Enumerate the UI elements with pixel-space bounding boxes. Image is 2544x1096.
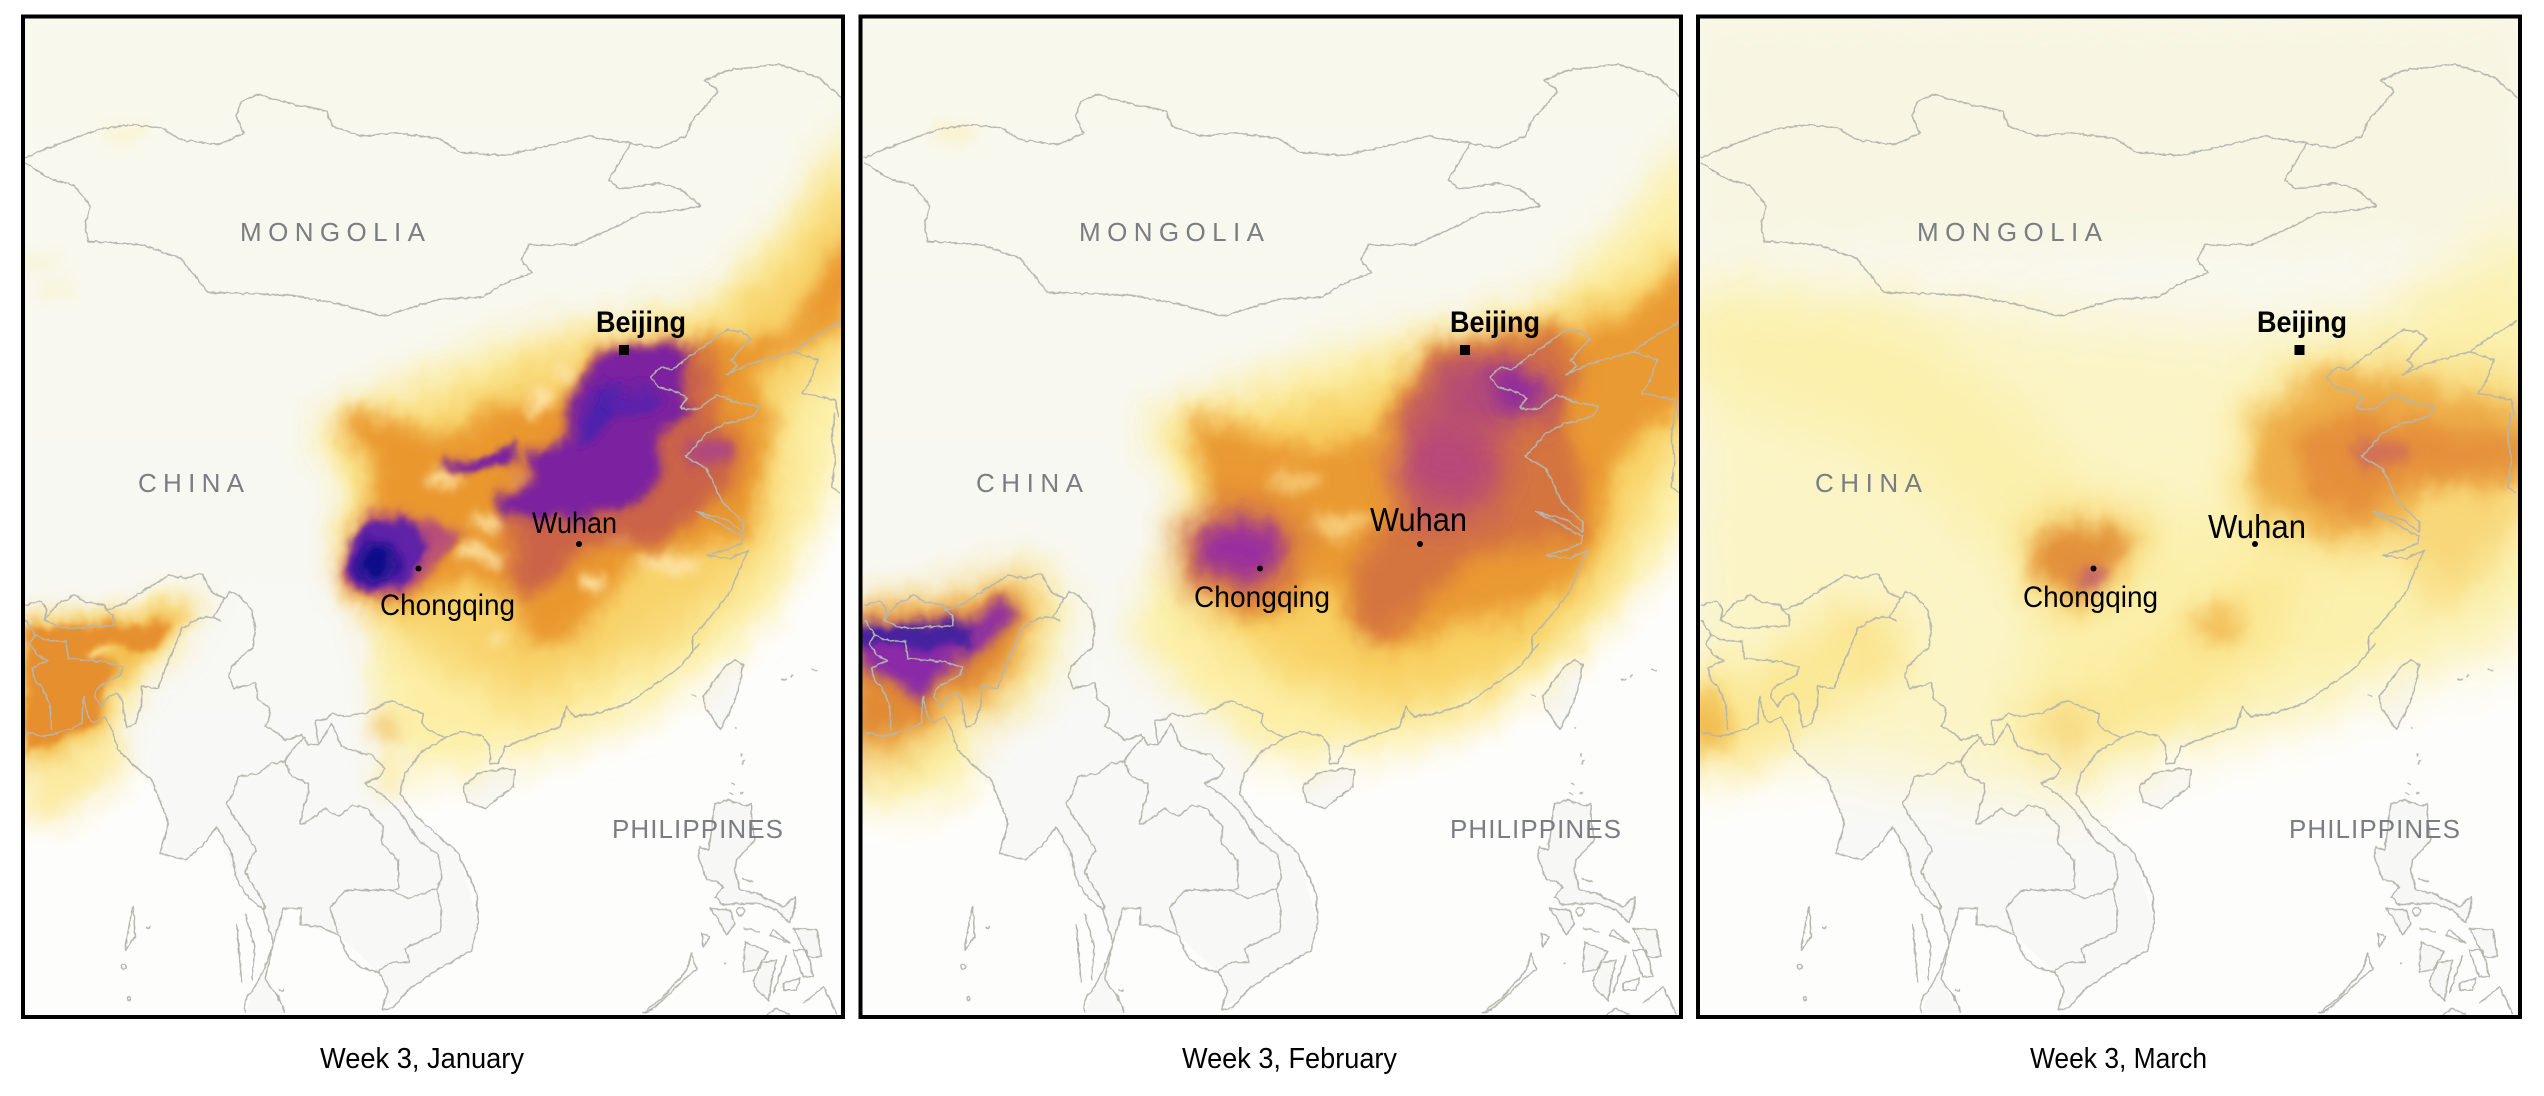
- caption: January: Week 3, January: [320, 1043, 524, 1075]
- city: Beijing: Beijing: [2257, 306, 2347, 339]
- city: Beijing: Beijing: [596, 306, 686, 339]
- January pollution heat layer: [19, 112, 863, 827]
- label: Mongolia: MONGOLIA: [240, 217, 426, 247]
- label: Mongolia: MONGOLIA: [1079, 217, 1265, 247]
- city: Chongqing: [380, 566, 515, 622]
- panel frame: [23, 16, 843, 1017]
- city: Beijing: Beijing: [1450, 306, 1540, 339]
- panel: Week 3, January map: [16, 14, 863, 1017]
- label: China: CHINA: [1815, 468, 1923, 498]
- city: Chongqing: [1194, 566, 1330, 614]
- panel frame: [1698, 16, 2520, 1017]
- March pollution heat layer: [1692, 14, 2532, 804]
- city: Chongqing: [2023, 566, 2158, 614]
- caption: March: Week 3, March: [2030, 1043, 2207, 1075]
- label: Philippines: PHILIPPINES: [612, 814, 783, 844]
- label: Philippines: PHILIPPINES: [2289, 814, 2460, 844]
- panel: Week 3, March map: [1692, 14, 2532, 1017]
- February pollution heat layer: [856, 126, 1695, 804]
- city: Beijing: [2257, 306, 2347, 355]
- city: Chongqing: Chongqing: [380, 589, 515, 622]
- label: China: CHINA: [976, 468, 1084, 498]
- city: Wuhan: Wuhan: [1370, 501, 1467, 538]
- city: Chongqing: Chongqing: [2023, 581, 2158, 614]
- city: Beijing: [1450, 306, 1540, 355]
- city: Wuhan: Wuhan: [2208, 508, 2306, 545]
- label: China: CHINA: [138, 468, 245, 498]
- city: Chongqing: Chongqing: [1194, 581, 1330, 614]
- label: Philippines: PHILIPPINES: [1450, 814, 1621, 844]
- label: Mongolia: MONGOLIA: [1917, 217, 2103, 247]
- city: Beijing: [596, 306, 686, 355]
- caption: February: Week 3, February: [1182, 1043, 1397, 1075]
- panel frame: [860, 16, 1681, 1017]
- city: Wuhan: Wuhan: [532, 507, 617, 540]
- panel: Week 3, February map: [856, 14, 1695, 1017]
